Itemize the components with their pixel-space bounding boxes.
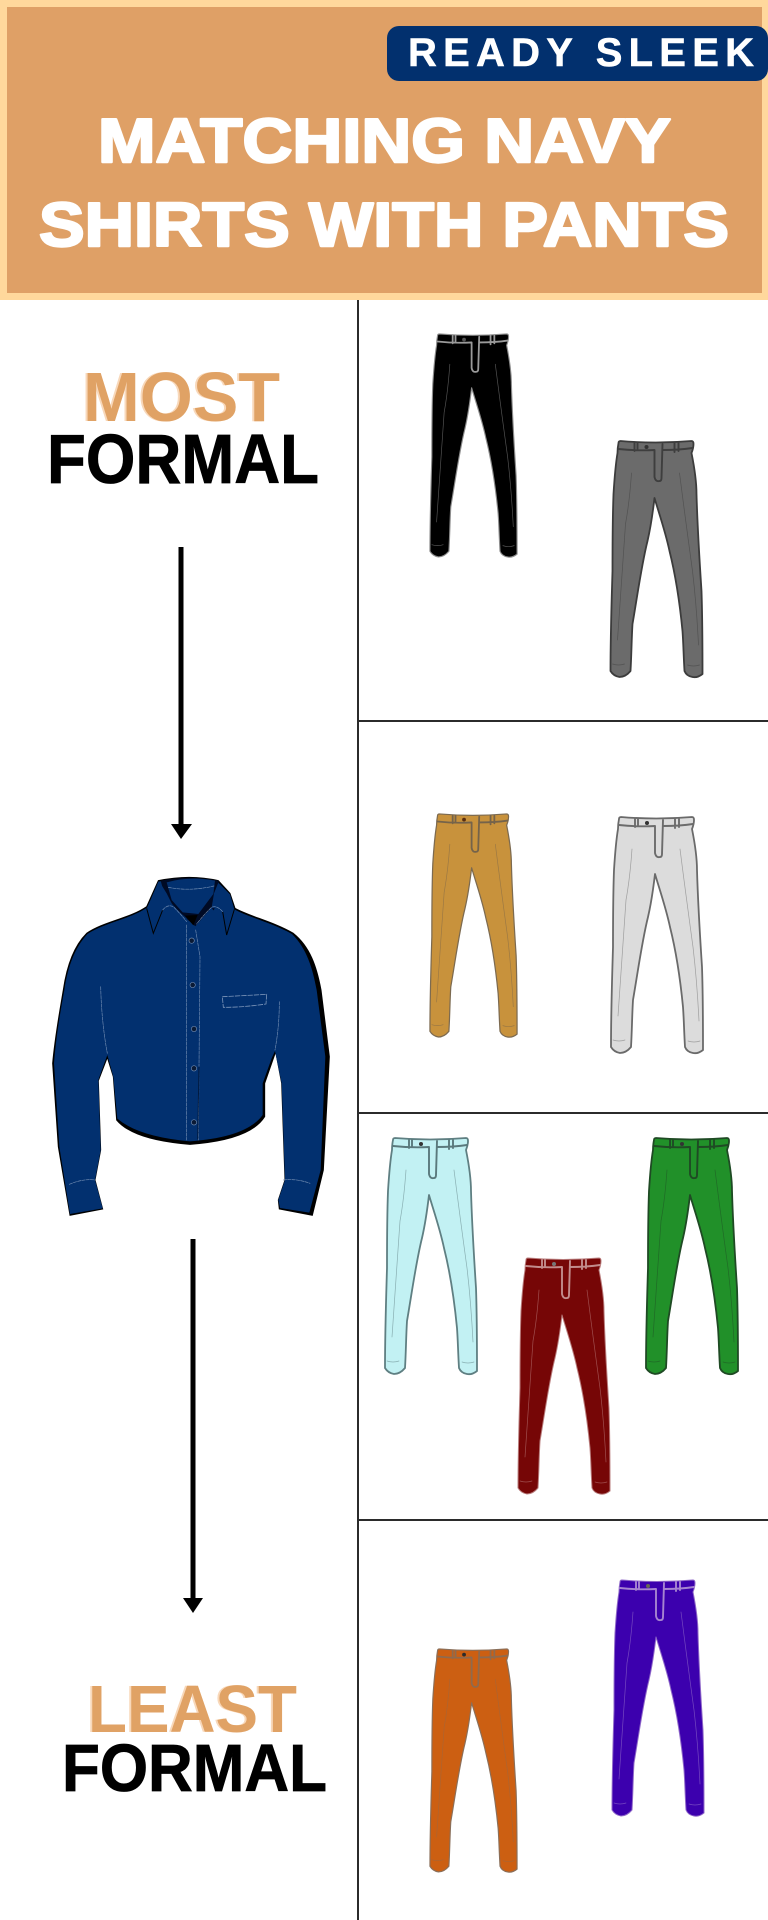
icon: orange pants (430, 1649, 517, 1872)
icon: navy shirt (53, 877, 329, 1215)
divider lines (358, 300, 768, 1920)
icon: tan pants (430, 814, 517, 1037)
least formal label: LEAST (88, 1672, 297, 1747)
title: SHIRTS WITH PANTS (39, 191, 729, 260)
shirt body (54, 878, 325, 1214)
title: MATCHING NAVY (98, 107, 671, 176)
shirt collar (147, 878, 234, 940)
shirt placket and buttons (187, 925, 200, 1140)
shirt seams and cuffs (69, 987, 310, 1184)
panel: formal pants (430, 814, 703, 1053)
icon: light grey pants (611, 817, 703, 1053)
panel: most formal pants (430, 334, 702, 677)
panel: least formal pants (430, 1580, 704, 1872)
brand badge: READY SLEEK (408, 31, 754, 75)
icon: black pants (430, 334, 517, 557)
least formal label (62, 1672, 327, 1806)
least formal label: FORMAL (62, 1731, 327, 1806)
most formal label: MOST (83, 358, 280, 436)
icon: dark red pants (518, 1258, 610, 1494)
icon: light blue pants (385, 1138, 477, 1374)
panel: casual pants (385, 1138, 738, 1494)
header banner (0, 0, 768, 300)
icon: green pants (646, 1138, 738, 1374)
title (39, 107, 729, 260)
most formal label: FORMAL (47, 420, 319, 498)
most formal label: MOST (81, 358, 278, 436)
shirt pocket (222, 994, 267, 1007)
arrow: shirt down to least formal (183, 1239, 203, 1613)
icon: dark grey pants (610, 441, 702, 677)
arrow: top down to shirt (171, 547, 192, 839)
most formal label (47, 358, 319, 498)
shirt shadow (53, 877, 329, 1215)
icon: purple pants (612, 1580, 704, 1816)
least formal label: LEAST (86, 1672, 295, 1747)
